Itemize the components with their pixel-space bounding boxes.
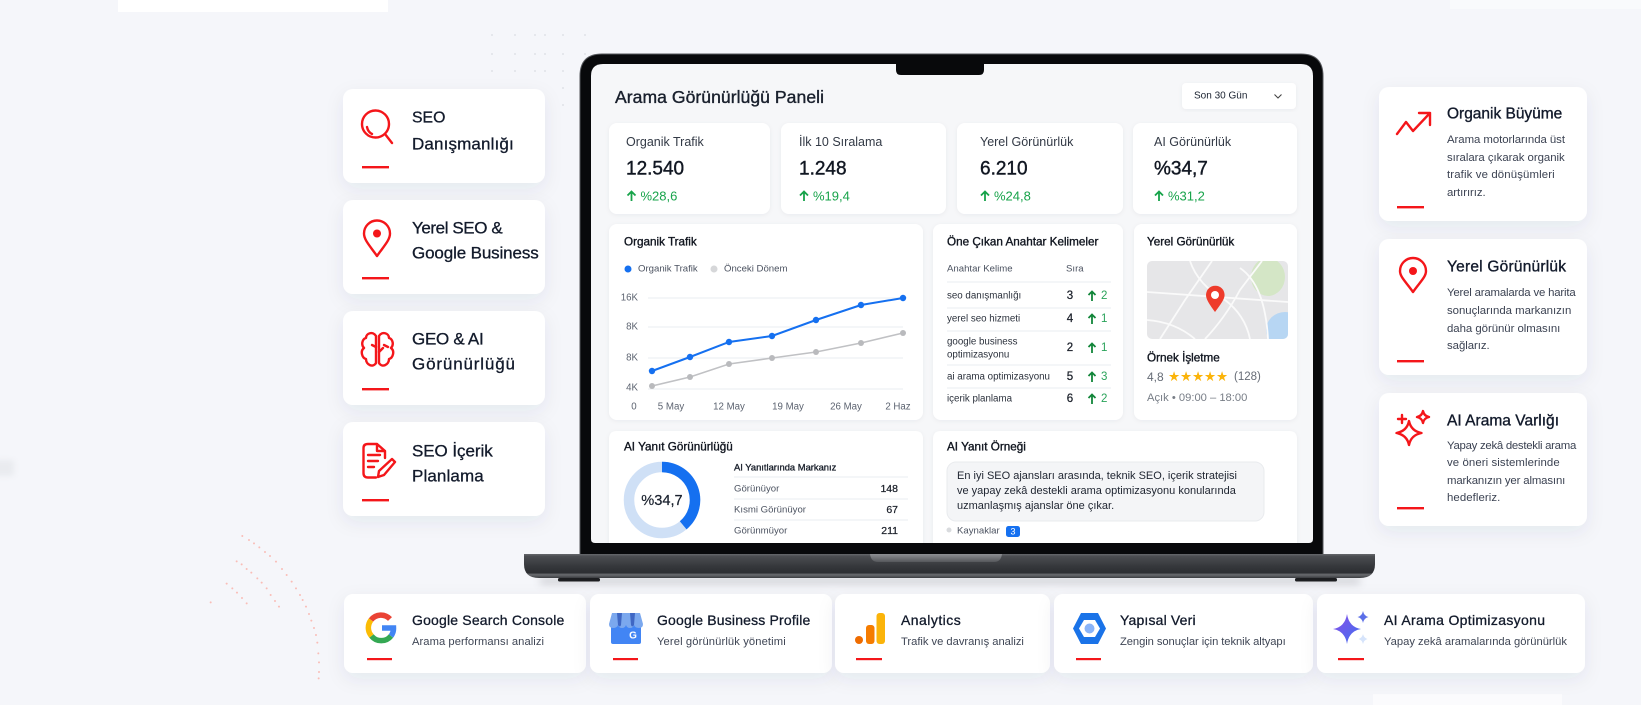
grid lines and axes: 8K bbox=[626, 352, 639, 364]
keyword rows: 1 bbox=[1101, 313, 1107, 325]
card: Organik Büyüme: artırırız. bbox=[1447, 187, 1486, 199]
laptop feet bbox=[558, 578, 1337, 582]
panel: local visibility: Açık • 09:00 – 18:00 bbox=[1147, 392, 1247, 404]
laptop bezel bbox=[580, 54, 1323, 556]
card: Yapısal Veri: Zengin sonuçlar için teknik altyapı bbox=[1120, 636, 1286, 648]
panel: top keywords: Sıra bbox=[1066, 264, 1084, 274]
card: Yerel SEO & Google Business: Yerel SEO & bbox=[412, 218, 503, 238]
card: Yerel Görünürlük: Yerel aramalarda ve harita bbox=[1447, 287, 1576, 299]
keyword rows: 2 bbox=[1101, 393, 1107, 405]
donut chart: %34,7 bbox=[641, 493, 683, 509]
keyword rows: yerel seo hizmeti bbox=[947, 314, 1020, 324]
keyword rows: 4 bbox=[1067, 313, 1074, 325]
panel: AI answer example: Kaynaklar bbox=[957, 526, 1000, 536]
keyword rows: 3 bbox=[1067, 290, 1073, 302]
grid lines and axes: 19 May bbox=[772, 402, 804, 412]
panel: top keywords bbox=[933, 224, 1123, 420]
laptop bbox=[524, 54, 1375, 584]
keyword rows: optimizasyonu bbox=[947, 350, 1009, 360]
card: Yerel Görünürlük: daha görünür olmasını bbox=[1447, 323, 1560, 335]
keyword rows: 6 bbox=[1067, 393, 1073, 405]
card: GEO & AI Görünürlüğü: GEO & AI bbox=[412, 330, 484, 348]
answer table: 211 bbox=[881, 525, 898, 537]
chart legend bbox=[624, 264, 787, 274]
decorative dots: lower left arcs bbox=[210, 535, 320, 679]
card: Yerel Görünürlük bbox=[1379, 239, 1587, 375]
laptop base bbox=[524, 554, 1375, 578]
icon: sparkles bbox=[1396, 411, 1429, 445]
dropdown: date range bbox=[1182, 83, 1296, 109]
card: SEO İçerik Planlama: SEO İçerik bbox=[412, 442, 493, 460]
answer bubble: uzmanlaşmış ajanslar öne çıkar. bbox=[957, 500, 1114, 512]
map pin bbox=[1206, 286, 1225, 312]
map bbox=[1147, 261, 1288, 339]
stat card: Organik Trafik: Organik Trafik bbox=[626, 135, 705, 149]
card: AI Arama Varlığı: ve öneri sistemlerinde bbox=[1447, 457, 1560, 469]
answer table: Görünmüyor bbox=[734, 526, 788, 536]
card: AI Arama Varlığı: markanızın yer almasını bbox=[1447, 475, 1565, 487]
keyword rows bbox=[947, 290, 1107, 405]
keyword rows: 1 bbox=[1101, 342, 1107, 354]
chart legend: Organik Trafik bbox=[638, 264, 698, 274]
card: AI Arama Optimizasyonu: Yapay zekâ aramalarında görünürlük bbox=[1384, 636, 1567, 648]
panel: AI answer visibility bbox=[609, 431, 923, 543]
stat card: Organik Trafik: 12.540 bbox=[626, 158, 684, 180]
card: SEO Danışmanlığı bbox=[343, 89, 545, 183]
card: Organik Büyüme: Organik Büyüme bbox=[1447, 106, 1562, 122]
grid lines and axes: 8K bbox=[626, 322, 639, 332]
card: AI Arama Varlığı: hedefleriz. bbox=[1447, 492, 1500, 504]
card: Google Search Console: Google Search Console bbox=[412, 612, 565, 628]
card: Google Search Console: Arama performansı analizi bbox=[412, 636, 544, 648]
card: AI Arama Optimizasyonu bbox=[1317, 594, 1585, 673]
card: Organik Büyüme bbox=[1379, 87, 1587, 221]
laptop hinge lip bbox=[870, 554, 1002, 562]
keyword rows: seo danışmanlığı bbox=[947, 290, 1021, 302]
panel: AI answer example bbox=[933, 431, 1297, 543]
grid lines and axes bbox=[621, 292, 911, 412]
keyword rows: google business bbox=[947, 336, 1018, 348]
panel: right benefit cards bbox=[1379, 87, 1587, 526]
card: Yapısal Veri: Yapısal Veri bbox=[1120, 612, 1196, 628]
grid lines and axes: 12 May bbox=[713, 402, 745, 412]
panel: top keywords: Öne Çıkan Anahtar Kelimeler bbox=[947, 236, 1098, 248]
icon: document and pencil bbox=[364, 444, 395, 478]
grid lines and axes: 16K bbox=[621, 292, 639, 304]
card: AI Arama Varlığı: Yapay zekâ destekli arama bbox=[1447, 440, 1577, 452]
keyword rows: 3 bbox=[1101, 371, 1107, 383]
stat card: Organik Trafik bbox=[609, 123, 770, 214]
icon: AI sparkle bbox=[1333, 611, 1368, 644]
panel: left service cards bbox=[343, 89, 545, 516]
stat card: Yerel Görünürlük: Yerel Görünürlük bbox=[980, 135, 1074, 149]
icon: map pin bbox=[364, 220, 390, 256]
grid lines and axes: 0 bbox=[631, 402, 637, 412]
card: Google Business Profile bbox=[590, 594, 832, 673]
sources badge: 3 bbox=[1010, 526, 1016, 536]
grid lines and axes: 2 Haz bbox=[885, 402, 911, 412]
decorative dots: top bbox=[491, 34, 586, 106]
panel: AI answer example: AI Yanıt Örneği bbox=[947, 440, 1026, 454]
answer table bbox=[734, 462, 908, 537]
card: SEO İçerik Planlama: Planlama bbox=[412, 466, 484, 486]
panel: local visibility: Yerel Görünürlük bbox=[1147, 236, 1234, 248]
card: SEO Danışmanlığı: Danışmanlığı bbox=[412, 134, 514, 154]
answer bubble: En iyi SEO ajansları arasında, teknik SEO, içerik stratejisi bbox=[957, 470, 1237, 482]
card: Google Business Profile: Yerel görünürlük yönetimi bbox=[657, 636, 786, 648]
panel: organic traffic chart bbox=[609, 224, 923, 420]
panel: dashboard bbox=[609, 83, 1304, 560]
icon: hexagon bbox=[1073, 613, 1106, 644]
stat card: AI Görünürlük: %34,7 bbox=[1154, 158, 1208, 180]
card: Analytics: Analytics bbox=[901, 612, 961, 628]
keyword rows: 2 bbox=[1067, 342, 1073, 354]
answer table: 67 bbox=[886, 504, 898, 516]
icon: Google Business store: G bbox=[629, 630, 637, 642]
card: GEO & AI Görünürlüğü: Görünürlüğü bbox=[412, 354, 515, 374]
card: AI Arama Varlığı bbox=[1379, 393, 1587, 526]
keyword rows: içerik planlama bbox=[947, 394, 1013, 404]
card: Analytics: Trafik ve davranış analizi bbox=[901, 636, 1024, 648]
heading: dashboard title: Arama Görünürlüğü Paneli bbox=[615, 87, 824, 107]
card: Google Search Console bbox=[344, 594, 586, 673]
laptop screen bbox=[591, 64, 1313, 543]
stat card: Yerel Görünürlük: %24,8 bbox=[994, 188, 1031, 204]
icon: Google Business store bbox=[609, 613, 643, 644]
card: GEO & AI Görünürlüğü bbox=[343, 311, 545, 405]
card: Yerel Görünürlük: Yerel Görünürlük bbox=[1447, 258, 1566, 276]
card: SEO Danışmanlığı: SEO bbox=[412, 110, 445, 126]
stat card: Organik Trafik: %28,6 bbox=[640, 188, 677, 204]
panel: local visibility bbox=[1134, 224, 1304, 420]
panel: local visibility: (128) bbox=[1234, 371, 1261, 383]
stat card: AI Görünürlük bbox=[1133, 123, 1297, 214]
stat card: AI Görünürlük: AI Görünürlük bbox=[1154, 135, 1232, 149]
rating stars: ★★★★★ bbox=[1168, 369, 1228, 385]
grid lines and axes: 26 May bbox=[830, 402, 862, 412]
card: Organik Büyüme: trafik ve dönüşümleri bbox=[1447, 169, 1555, 181]
card: Yerel SEO & Google Business: Google Business bbox=[412, 244, 539, 262]
icon: growth arrow bbox=[1397, 113, 1430, 134]
card: Organik Büyüme: Arama motorlarında üst bbox=[1447, 134, 1566, 146]
card: Analytics bbox=[835, 594, 1050, 673]
stat card: İlk 10 Sıralama: İlk 10 Sıralama bbox=[799, 135, 882, 149]
chart legend: Önceki Dönem bbox=[724, 264, 787, 274]
line: organic traffic bbox=[649, 295, 906, 374]
card: Organik Büyüme: sıralara çıkarak organik bbox=[1447, 152, 1565, 164]
stat card: Yerel Görünürlük bbox=[957, 123, 1123, 214]
card: AI Arama Optimizasyonu: AI Arama Optimizasyonu bbox=[1384, 612, 1545, 628]
icon: magnifier bbox=[362, 110, 392, 143]
panel: local visibility: 4,8 bbox=[1147, 370, 1164, 384]
icon: Google G bbox=[368, 615, 394, 641]
card: SEO İçerik Planlama bbox=[343, 422, 545, 516]
answer bubble: ve yapay zekâ destekli arama optimizasyonu konularında bbox=[957, 485, 1237, 497]
line: previous period bbox=[649, 330, 906, 389]
icon: brain bbox=[362, 333, 393, 366]
panel: organic traffic chart: Organik Trafik bbox=[624, 236, 697, 248]
stat card: İlk 10 Sıralama: 1.248 bbox=[799, 158, 847, 180]
icon: map pin bbox=[1400, 258, 1426, 292]
card: AI Arama Varlığı: AI Arama Varlığı bbox=[1447, 412, 1559, 430]
card: Yerel Görünürlük: sağlarız. bbox=[1447, 340, 1490, 352]
grid lines and axes: 5 May bbox=[658, 402, 684, 412]
card: Yerel SEO & Google Business bbox=[343, 200, 545, 294]
card: Google Business Profile: Google Business Profile bbox=[657, 612, 811, 628]
answer table: 148 bbox=[880, 483, 898, 495]
keyword rows: 5 bbox=[1067, 371, 1073, 383]
answer bubble bbox=[947, 462, 1264, 521]
answer table: Kısmi Görünüyor bbox=[734, 504, 807, 516]
card: Yerel Görünürlük: sonuçlarında markanızın bbox=[1447, 305, 1571, 317]
grid lines and axes: 4K bbox=[626, 382, 639, 394]
answer table: AI Yanıtlarında Markanız bbox=[734, 462, 837, 472]
keyword rows: 2 bbox=[1101, 290, 1107, 302]
camera notch bbox=[896, 62, 984, 75]
panel: top keywords: Anahtar Kelime bbox=[947, 264, 1013, 274]
icon: Analytics bars bbox=[855, 613, 885, 644]
panel: AI answer visibility: AI Yanıt Görünürlüğü bbox=[624, 440, 733, 454]
stat card: AI Görünürlük: %31,2 bbox=[1168, 188, 1205, 204]
card: Yapısal Veri bbox=[1054, 594, 1313, 673]
stat card: Yerel Görünürlük: 6.210 bbox=[980, 158, 1028, 180]
stat card: İlk 10 Sıralama bbox=[781, 123, 946, 214]
stat card: İlk 10 Sıralama: %19,4 bbox=[813, 188, 850, 204]
answer table: Görünüyor bbox=[734, 484, 780, 494]
panel: bottom tool cards bbox=[344, 594, 1585, 673]
panel: local visibility: Örnek İşletme bbox=[1147, 352, 1220, 364]
keyword rows: ai arama optimizasyonu bbox=[947, 372, 1050, 382]
dropdown: date range: Son 30 Gün bbox=[1194, 90, 1247, 102]
donut chart bbox=[629, 467, 695, 533]
sources badge bbox=[1006, 526, 1020, 537]
laptop shadow bbox=[540, 578, 1360, 584]
